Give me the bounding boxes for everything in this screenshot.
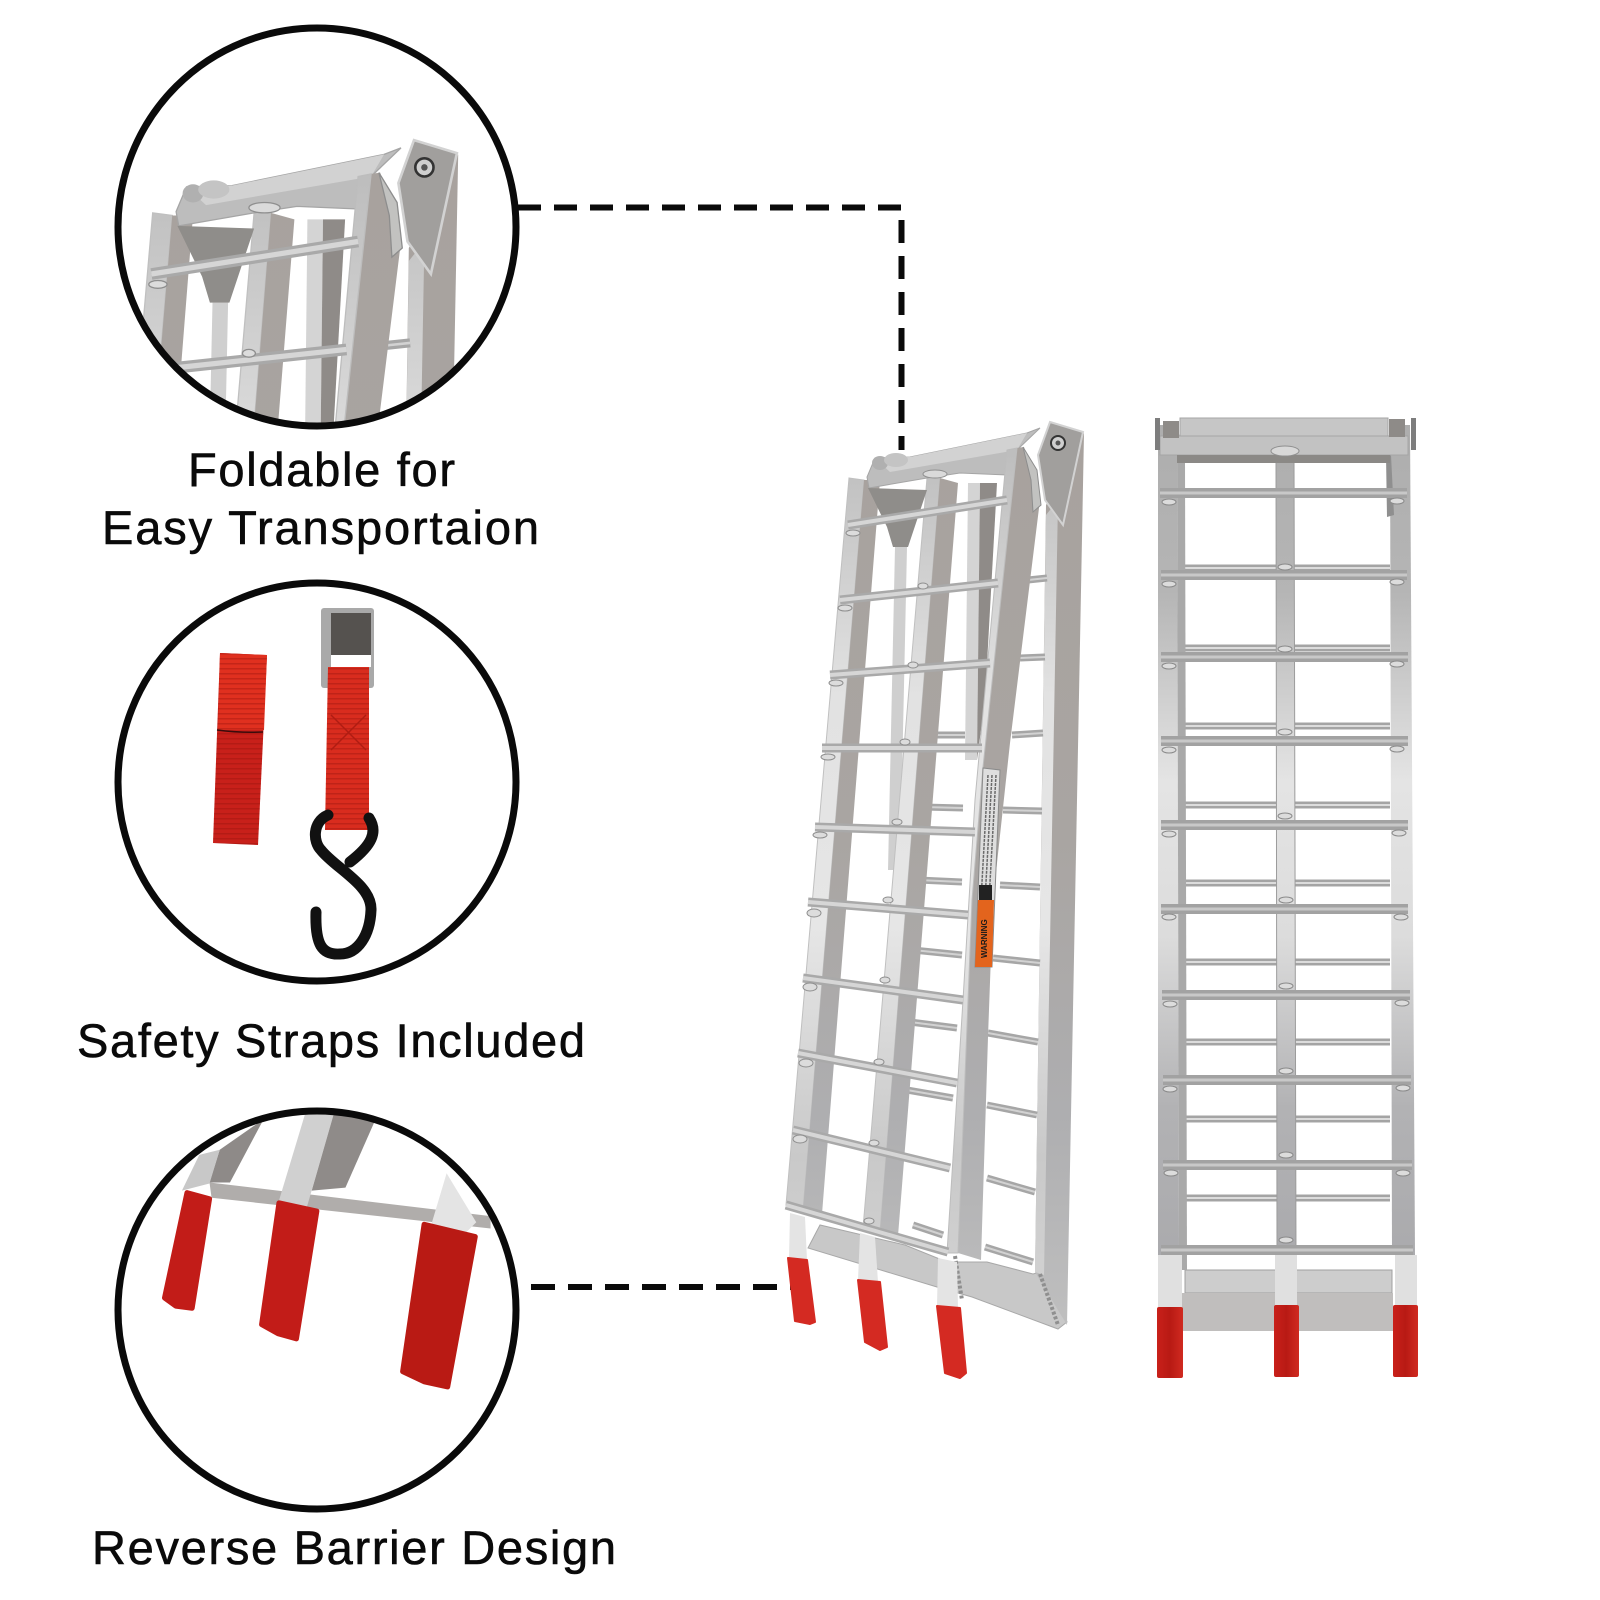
ramp foot middle xyxy=(858,1233,887,1350)
label: foldable xyxy=(102,443,539,554)
angled folding ramp xyxy=(786,422,1084,1378)
ramp 2 back rungs xyxy=(1185,568,1390,1198)
right rail stub xyxy=(432,1174,476,1232)
circle outline xyxy=(118,1111,516,1509)
red peg middle xyxy=(262,1203,317,1339)
ramp middle rail xyxy=(863,478,958,1236)
dashed connector: foldable callout to ramp hinge xyxy=(518,208,902,450)
ramp rear rungs xyxy=(907,578,1047,1262)
ramp 2 front rungs xyxy=(1160,493,1413,1250)
warning label: WARNING xyxy=(980,919,989,958)
ramp 2 top crossbars xyxy=(1155,418,1416,463)
ramp 2 centre rail xyxy=(1276,455,1296,1255)
enlarged hinge detail xyxy=(143,138,458,422)
straight front-view ramp xyxy=(1155,418,1418,1378)
ramp rear centre rail xyxy=(888,483,997,870)
middle rail stub xyxy=(279,1114,374,1206)
ramp end welds xyxy=(955,1256,1058,1325)
ramp rung welds xyxy=(793,530,928,1224)
ramp 2 right rail xyxy=(1386,425,1415,1255)
ramp 2 bottom plate xyxy=(1182,1270,1393,1331)
circle outline xyxy=(118,583,516,981)
ramp 2 rung welds xyxy=(1162,498,1410,1243)
feet cross bar xyxy=(210,1182,491,1228)
label: foldable: Foldable for xyxy=(188,443,455,496)
ramp hinge plate with bolt xyxy=(1038,422,1083,525)
ramp 2 left rail xyxy=(1158,425,1187,1270)
red peg left xyxy=(165,1193,210,1308)
ramp rear rail xyxy=(1035,433,1084,1325)
ramp right front rail xyxy=(947,447,1041,1260)
left rail stub xyxy=(182,1119,264,1191)
circle outline xyxy=(118,28,516,426)
label: foldable: Easy Transportaion xyxy=(102,501,539,554)
ramp top crossbar and hinges xyxy=(867,428,1040,547)
ramp left rail xyxy=(786,478,880,1214)
cam buckle xyxy=(321,608,374,688)
ramp front rungs xyxy=(786,500,1007,1252)
ramp 2 foot left xyxy=(1157,1255,1183,1378)
ratchet strap xyxy=(325,667,369,830)
red peg right xyxy=(403,1224,475,1387)
warning label xyxy=(975,768,1000,967)
label: reverse barrier: Reverse Barrier Design xyxy=(92,1521,616,1574)
dashed connector: barrier callout to ramp feet xyxy=(531,1284,792,1290)
ramp 2 foot middle xyxy=(1274,1255,1299,1377)
callout circle: safety straps xyxy=(118,583,516,981)
S hook xyxy=(315,815,373,954)
callout circle: reverse barrier xyxy=(118,1109,516,1509)
enlarged feet detail xyxy=(165,1109,491,1387)
ramp rear plate xyxy=(808,1225,1067,1329)
ramp foot right xyxy=(937,1258,966,1378)
callout circle: foldable hinge xyxy=(114,24,520,430)
ramp 2 foot right xyxy=(1393,1255,1418,1377)
ramp foot left xyxy=(788,1213,815,1324)
label: safety straps: Safety Straps Included xyxy=(77,1014,585,1067)
loose red strap xyxy=(213,653,267,845)
